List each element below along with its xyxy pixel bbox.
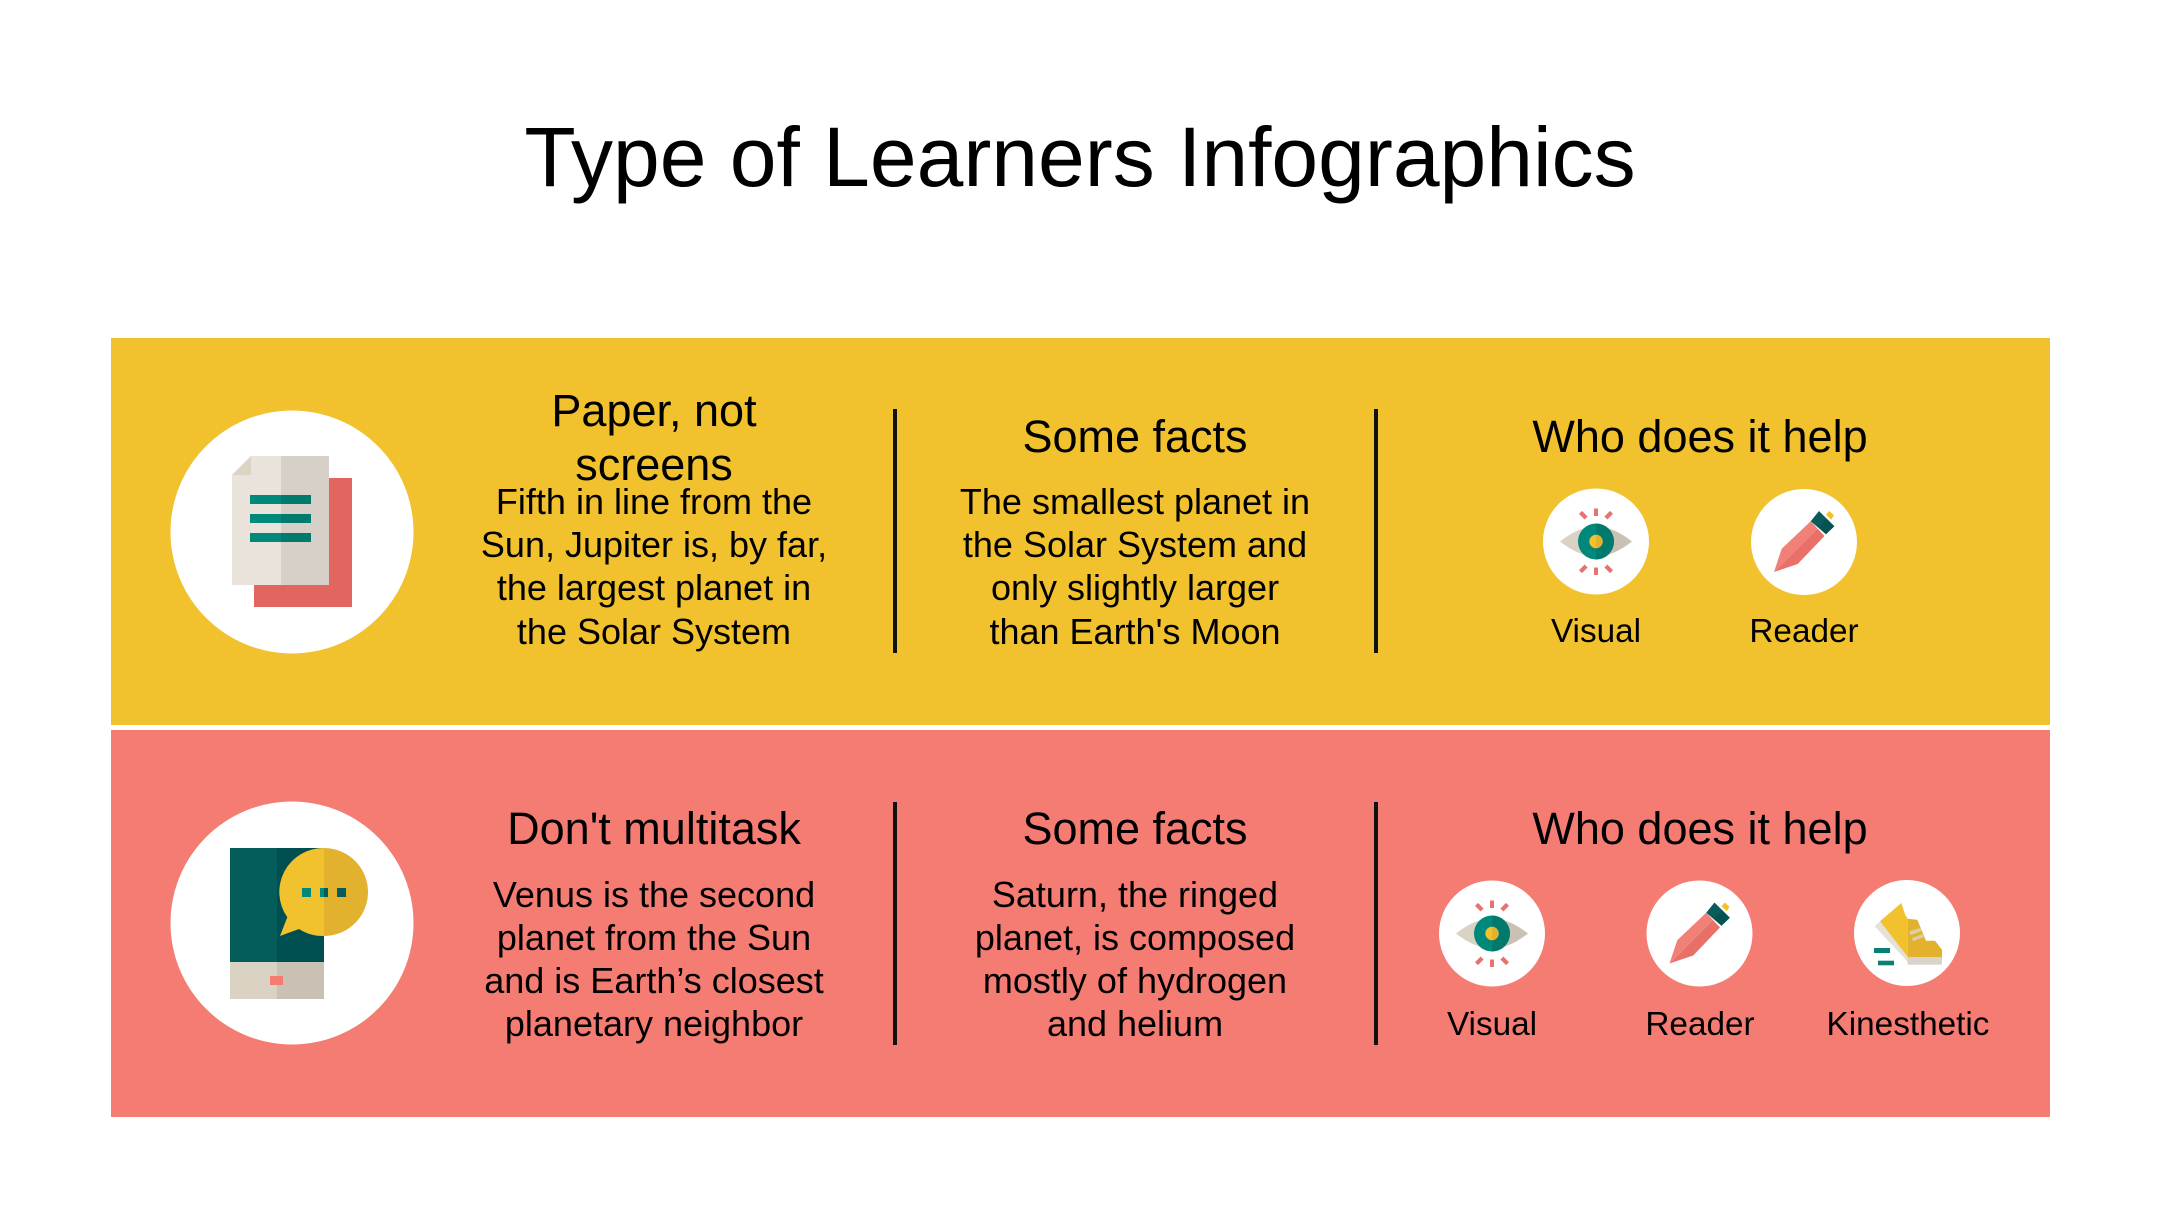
title: Type of Learners Infographics [524, 110, 1636, 204]
text: top facts: the Solar System and [963, 524, 1307, 565]
text: top facts: only slightly larger [991, 567, 1279, 608]
heading: top some facts: Some facts [1022, 411, 1248, 462]
text: paper description: Sun, Jupiter is, by far, [481, 524, 827, 565]
divider: bottom right [1374, 802, 1378, 1045]
heading: bottom who does it help: Who does it help [1532, 803, 1868, 854]
text: multitask description: and is Earth’s closest [484, 960, 824, 1001]
text: top facts: The smallest planet in [960, 481, 1310, 522]
label: kinesthetic: Kinesthetic [1827, 1006, 1989, 1043]
icon: bottom reader pencil [1646, 880, 1752, 986]
text: multitask description [484, 874, 824, 1044]
text: top facts: than Earth's Moon [989, 611, 1281, 652]
divider: top right [1374, 409, 1378, 653]
icon: phone with speech bubble [170, 802, 414, 1044]
panel: paper, not screens [110, 338, 2050, 725]
heading: don't multitask: Don't multitask [507, 803, 801, 854]
icon: bottom visual eye [1439, 880, 1545, 986]
text: bottom facts [975, 874, 1295, 1044]
divider: bottom left [893, 802, 897, 1045]
heading: paper, not screens [551, 384, 757, 490]
label: bottom visual: Visual [1447, 1006, 1537, 1043]
text: top facts [960, 481, 1310, 652]
text: multitask description: planet from the Sun [497, 917, 811, 958]
icon: paper documents [170, 410, 414, 654]
label: top visual: Visual [1551, 613, 1641, 650]
heading: paper, not screens: Paper, not [551, 384, 757, 436]
text: bottom facts: mostly of hydrogen [983, 960, 1287, 1001]
icon: top visual eye [1543, 488, 1649, 594]
label: top reader: Reader [1749, 613, 1859, 650]
label: bottom reader: Reader [1645, 1006, 1755, 1043]
text: paper description: the largest planet in [497, 567, 811, 608]
icon: top reader pencil [1751, 489, 1857, 595]
text: paper description: Fifth in line from the [496, 481, 812, 522]
text: paper description [481, 481, 827, 652]
text: bottom facts: and helium [1047, 1003, 1223, 1044]
text: multitask description: planetary neighbor [505, 1003, 803, 1044]
text: multitask description: Venus is the second [493, 874, 815, 914]
divider: top left [893, 409, 897, 653]
panel: don't multitask [110, 730, 2050, 1117]
text: bottom facts: Saturn, the ringed [992, 874, 1278, 914]
text: paper description: the Solar System [517, 611, 791, 652]
heading: bottom some facts: Some facts [1022, 803, 1248, 854]
text: bottom facts: planet, is composed [975, 917, 1295, 958]
heading: top who does it help: Who does it help [1532, 411, 1868, 462]
icon: kinesthetic shoe [1854, 880, 1960, 986]
heading: paper, not screens: screens [575, 438, 733, 490]
